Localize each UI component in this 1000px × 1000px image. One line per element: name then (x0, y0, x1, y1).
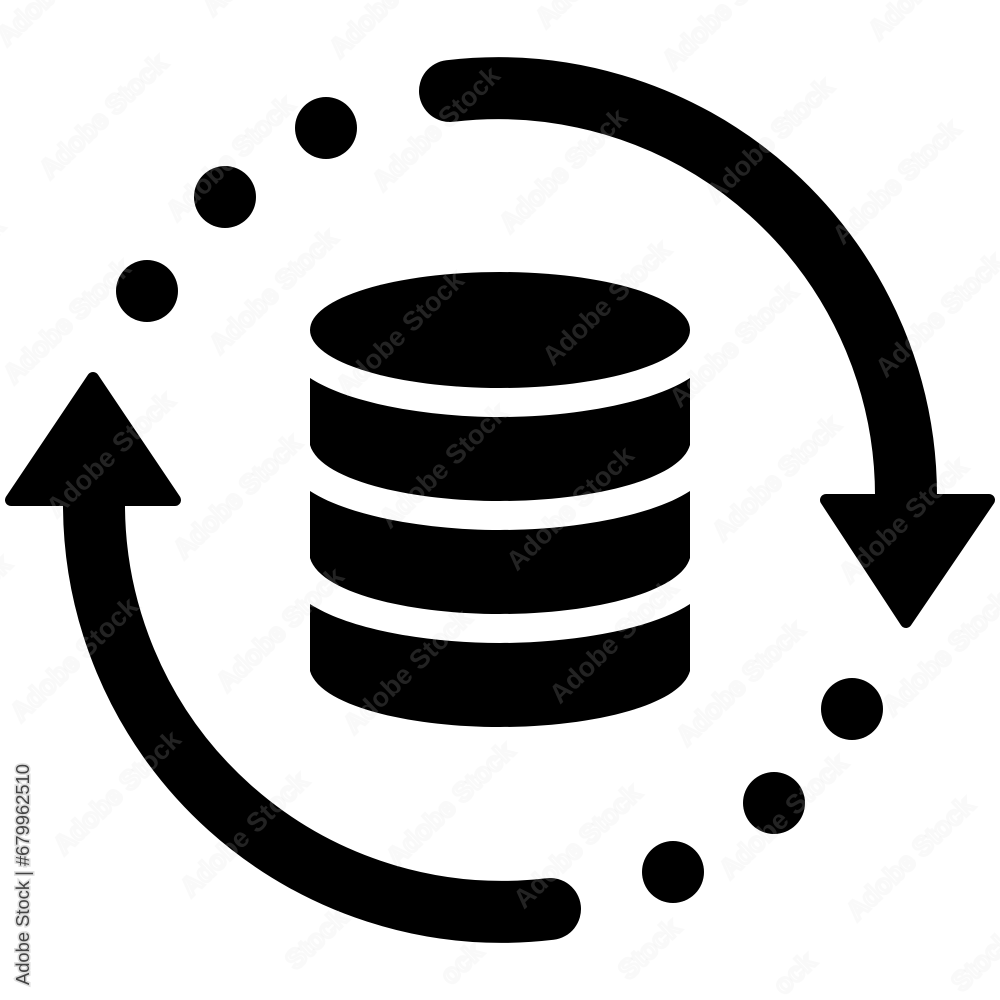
watermark: repeated Adobe Stock text: Adobe Stock (0, 252, 138, 389)
watermark: repeated Adobe Stock text: Adobe Stock (826, 113, 967, 250)
watermark: repeated Adobe Stock text: Stock (612, 912, 687, 985)
watermark: repeated Adobe Stock text: Adobe Stock (670, 614, 811, 751)
watermark: repeated Adobe Stock text: Adobe Stock (706, 409, 847, 546)
watermark: repeated Adobe Stock text: Adobe Stock (507, 777, 648, 914)
watermark: repeated Adobe Stock text: Adobe Stock (833, 451, 974, 588)
arrow: top right clockwise arc (450, 88, 989, 622)
icon: database cylinder (310, 272, 690, 727)
dots: top left (116, 97, 357, 322)
watermark: repeated Adobe Stock text: Adobe Stock (493, 101, 634, 238)
watermark: repeated Adobe Stock text: Adobe Stock (203, 222, 344, 359)
watermark: repeated Adobe Stock text: Adobe Stock (713, 747, 854, 884)
watermark: repeated Adobe Stock text: Adobe Stock (380, 735, 521, 872)
watermark: repeated Adobe Stock text: Adobe Stock (500, 439, 641, 576)
watermark: repeated Adobe Stock text: ock (767, 946, 822, 1000)
watermark: repeated Adobe Stock text: Adobe Stock (337, 602, 478, 739)
watermark: repeated Adobe Stock text: Adobe Stock (840, 789, 981, 926)
watermark: repeated Adobe Stock text: Adobe Stock (47, 723, 188, 860)
watermark: repeated Adobe Stock text: Adobe Stock (373, 397, 514, 534)
watermark: repeated Adobe Stock text: Adobe Stock (40, 385, 181, 522)
dots: bottom right (642, 678, 883, 903)
watermark: repeated Adobe Stock text: Adobe Stock (366, 59, 507, 196)
watermark: repeated Adobe Stock text: Adobe Stock (210, 560, 351, 697)
watermark: repeated Adobe Stock text: ock (434, 936, 489, 990)
watermark: repeated Adobe Stock text: Adobe Stock (4, 590, 145, 727)
watermark: repeated Adobe Stock text: Adobe Stock (663, 276, 804, 413)
watermark: repeated Adobe Stock text: Adobe Stock (174, 765, 315, 902)
watermark: repeated Adobe Stock text: Adobe Stock (160, 89, 301, 226)
arrow: bottom left clockwise arc (11, 378, 550, 912)
watermark: repeated Adobe Stock text: Adobe Stock (699, 71, 840, 208)
watermark: repeated Adobe Stock text: Adobe Stock (536, 234, 677, 371)
watermark: repeated Adobe Stock text: Adobe Stock (33, 47, 174, 184)
watermark: repeated Adobe Stock text: Adobe Stock (543, 572, 684, 709)
watermark: repeated Adobe Stock text: Adobe Stock (167, 427, 308, 564)
watermark: repeated Adobe Stock text: Stock (279, 902, 354, 975)
stock credit text: Adobe Stock | #679962510 (13, 764, 33, 985)
watermark: repeated Adobe Stock text: Adobe Stock (330, 264, 471, 401)
